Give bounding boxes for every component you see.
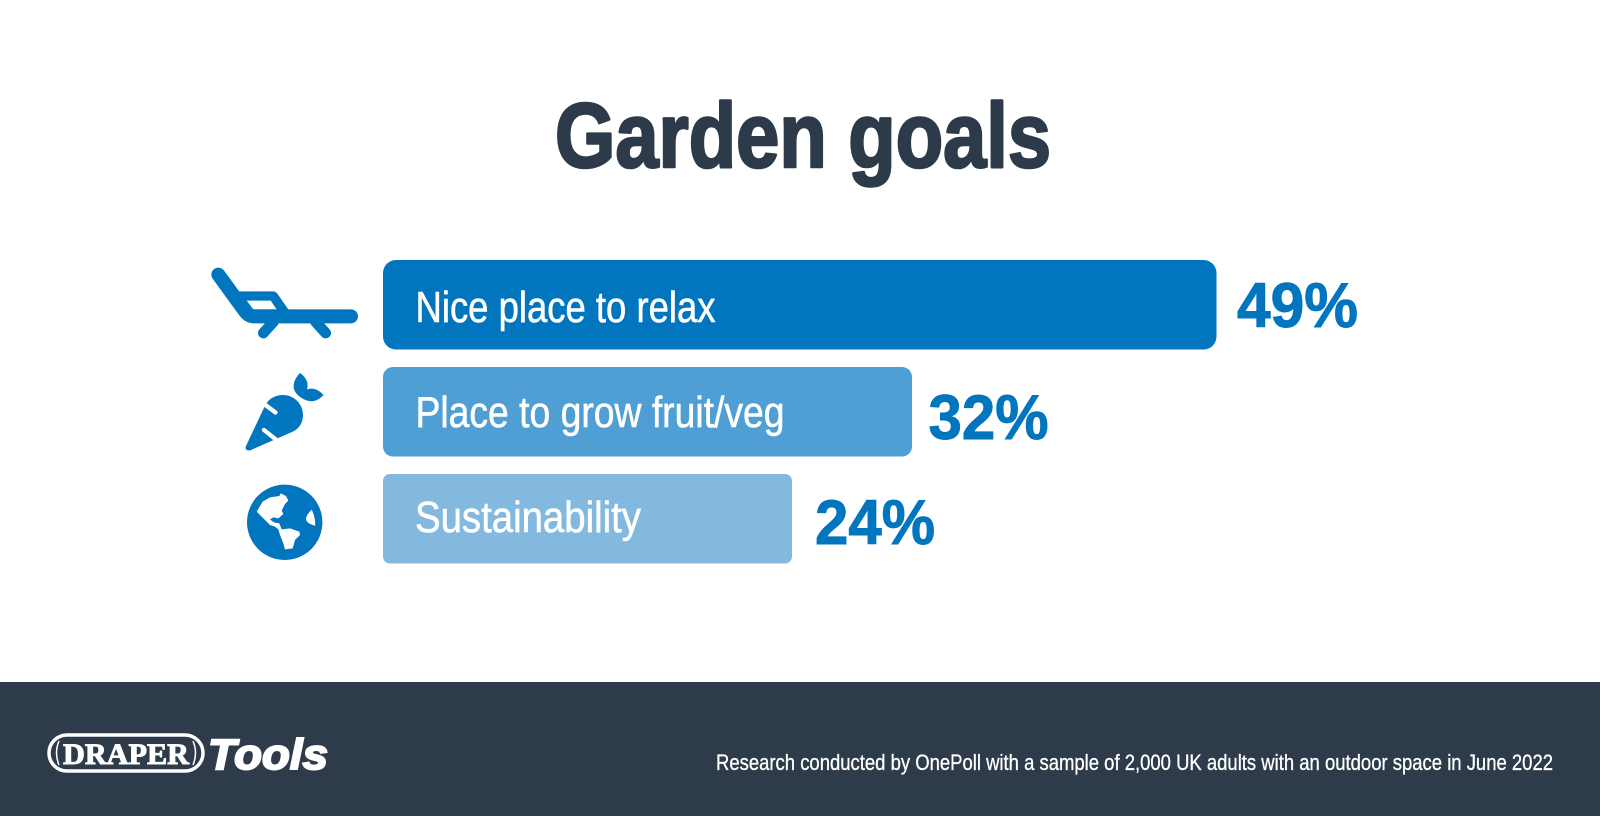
value: 24%: 24% [815,488,935,558]
logo: Draper Tools: Tools [208,731,328,779]
bar label: place to grow fruit/veg: Place to grow fruit/veg [416,388,784,437]
icon: carrot [246,373,324,450]
value: 32%: 32% [928,383,1048,453]
footer band [0,682,1600,816]
bar: sustainability [383,474,792,564]
logo: Draper Tools: DRAPER [63,738,189,771]
bar: nice place to relax [383,260,1216,350]
bar label: nice place to relax: Nice place to relax [416,283,716,332]
bar label: sustainability: Sustainability [415,493,641,542]
title: Garden goals [555,85,1051,187]
logo: Draper Tools [49,731,328,779]
value: 49%: 49% [1237,271,1358,341]
icon: globe [247,485,322,560]
bar: place to grow fruit/veg [383,367,912,456]
icon: sun lounger [218,275,351,333]
